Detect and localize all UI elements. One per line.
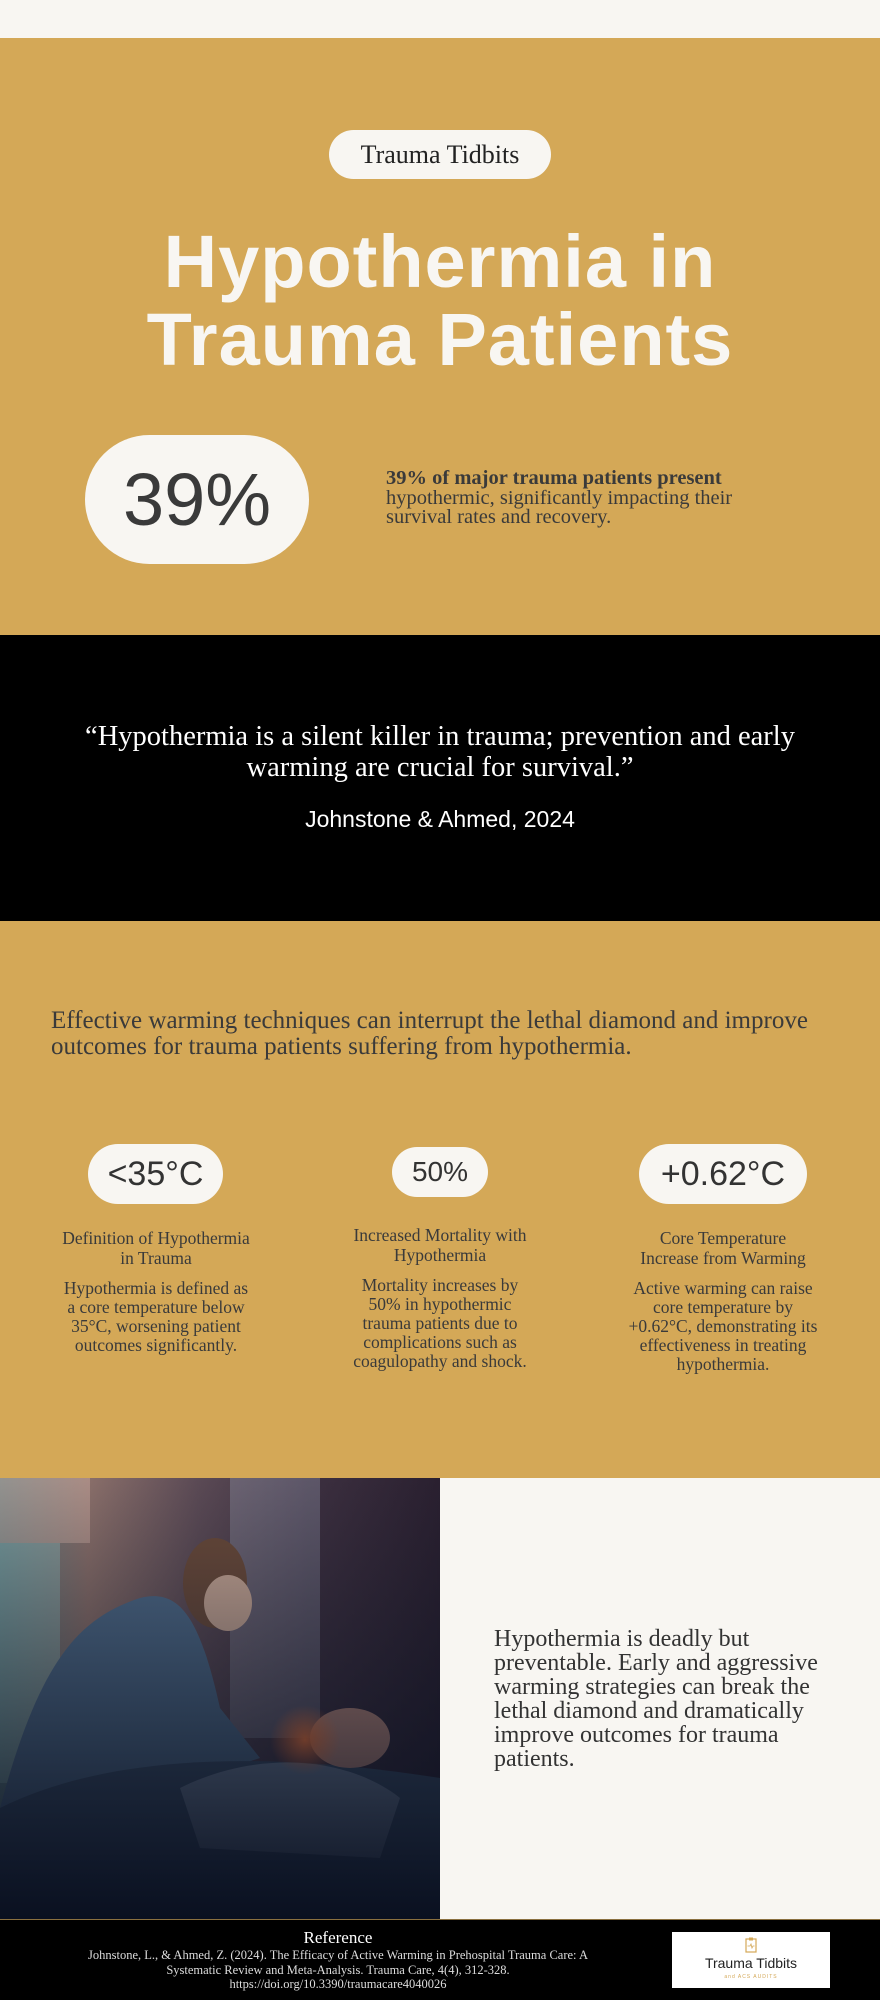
description: Hypothermia is defined as	[64, 1278, 248, 1298]
citation: Systematic Review and Meta-Analysis. Trauma Care, 4(4), 312-328.	[166, 1962, 510, 1976]
panel: statistics	[0, 921, 880, 1478]
stat text	[386, 467, 732, 528]
stat text: survival rates and recovery.	[386, 506, 611, 528]
description: +0.62°C, demonstrating its	[629, 1316, 817, 1336]
heading: Increased Mortality with	[353, 1225, 526, 1245]
stat 1	[62, 1144, 250, 1355]
intro text: outcomes for trauma patients suffering from hypothermia.	[51, 1033, 632, 1060]
icon: clipboard	[745, 1938, 757, 1953]
description: outcomes significantly.	[75, 1335, 237, 1355]
conclusion text: lethal diamond and dramatically	[494, 1698, 804, 1724]
quote text: “Hypothermia is a silent killer in trauma; prevention and early	[85, 721, 795, 752]
image: nurse warming patient	[0, 1478, 440, 1920]
logo: and ACS AUDITS	[724, 1974, 778, 1980]
pill: 50%	[392, 1147, 488, 1197]
description: complications such as	[363, 1332, 517, 1352]
heading: Hypothermia	[394, 1245, 486, 1265]
quote text	[85, 721, 795, 783]
pill: <35°C	[88, 1144, 223, 1204]
citation: https://doi.org/10.3390/traumacare4040026	[229, 1977, 447, 1991]
conclusion text: Hypothermia is deadly but	[494, 1626, 749, 1652]
description: 50% in hypothermic	[369, 1294, 511, 1314]
intro text: Effective warming techniques can interrupt the lethal diamond and improve	[51, 1007, 808, 1034]
description	[629, 1278, 817, 1374]
heading	[640, 1228, 806, 1268]
title: Hypothermia in	[164, 220, 716, 303]
description	[64, 1278, 248, 1355]
title	[147, 220, 733, 381]
description: Active warming can raise	[633, 1278, 813, 1298]
conclusion text	[494, 1626, 818, 1772]
badge: Trauma Tidbits	[329, 130, 551, 179]
badge: Trauma Tidbits: Trauma Tidbits	[361, 140, 519, 168]
description: trauma patients due to	[362, 1313, 518, 1333]
heading: in Trauma	[120, 1248, 192, 1268]
description: a core temperature below	[67, 1297, 245, 1317]
pill: <35°C: <35°C	[108, 1154, 203, 1192]
pill: +0.62°C: +0.62°C	[661, 1154, 785, 1192]
stat 2	[353, 1147, 527, 1371]
reference heading: Reference	[304, 1928, 372, 1947]
footer	[0, 1919, 880, 2000]
heading	[62, 1228, 250, 1268]
pill: +0.62°C	[639, 1144, 807, 1204]
conclusion text: patients.	[494, 1746, 575, 1772]
description: Mortality increases by	[362, 1275, 518, 1295]
pill: 50%: 50%	[412, 1156, 468, 1187]
stat 3	[629, 1144, 817, 1374]
logo: Trauma Tidbits	[705, 1955, 797, 1971]
title: Trauma Patients	[147, 298, 733, 381]
heading: Definition of Hypothermia	[62, 1228, 250, 1248]
conclusion text: improve outcomes for trauma	[494, 1722, 779, 1748]
panel: quote	[0, 635, 880, 921]
description	[353, 1275, 527, 1371]
stat pill: 39%: 39%	[123, 458, 271, 541]
stat text: 39% of major trauma patients present	[386, 467, 722, 489]
attribution: Johnstone & Ahmed, 2024	[305, 806, 575, 832]
conclusion text: warming strategies can break the	[494, 1674, 810, 1700]
panel: hero	[0, 38, 880, 635]
description: 35°C, worsening patient	[71, 1316, 241, 1336]
stat text: hypothermic, significantly impacting their	[386, 486, 732, 508]
citation: Johnstone, L., & Ahmed, Z. (2024). The Efficacy of Active Warming in Prehospital Trauma Care: A	[88, 1948, 588, 1962]
conclusion text: preventable. Early and aggressive	[494, 1650, 818, 1676]
intro text	[51, 1007, 808, 1060]
quote text: warming are crucial for survival.”	[247, 752, 633, 783]
description: core temperature by	[653, 1297, 793, 1317]
stat pill: 39%	[85, 435, 309, 564]
heading	[353, 1225, 526, 1265]
heading: Increase from Warming	[640, 1248, 806, 1268]
description: effectiveness in treating	[640, 1335, 806, 1355]
description: hypothermia.	[677, 1354, 769, 1374]
citation	[88, 1948, 588, 1991]
description: coagulopathy and shock.	[353, 1351, 527, 1371]
heading: Core Temperature	[660, 1228, 786, 1248]
logo	[672, 1932, 830, 1988]
